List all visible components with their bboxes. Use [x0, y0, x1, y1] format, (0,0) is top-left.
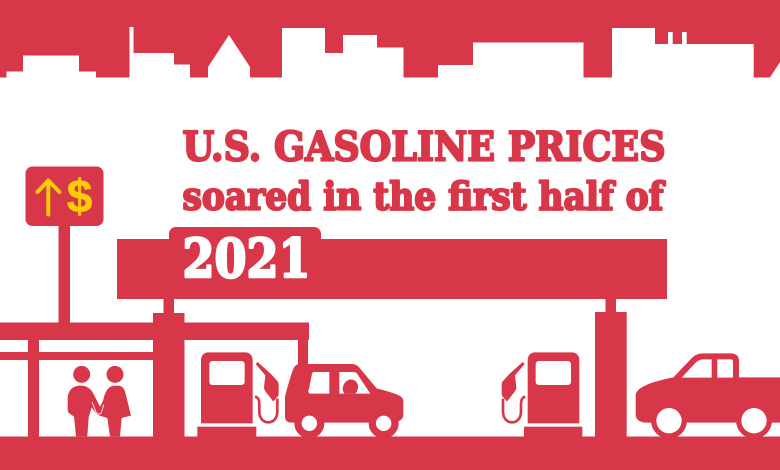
pump and car, left [197, 352, 403, 438]
icon: car [285, 364, 403, 438]
icon: nozzle [256, 362, 279, 402]
ground [0, 436, 780, 470]
year 2021: 2021 [182, 228, 310, 290]
icon: nozzle [502, 362, 525, 402]
station column, right [595, 299, 627, 437]
canopy banner [117, 227, 667, 299]
icon: fuel pump [502, 352, 582, 437]
icon: fuel pump [197, 352, 279, 437]
title line 1: U.S. GASOLINE PRICES [182, 122, 666, 170]
icon: pickup truck [636, 353, 780, 439]
dollar sign: $ [67, 170, 92, 222]
title [182, 122, 666, 218]
icon: up arrow [38, 180, 60, 214]
station roof structure, left [0, 299, 309, 437]
title line 2: soared in the first half of [182, 174, 666, 218]
skyline [0, 0, 780, 78]
price sign [26, 166, 104, 325]
pump and pickup truck, right [502, 352, 780, 439]
icon: couple [68, 366, 131, 436]
